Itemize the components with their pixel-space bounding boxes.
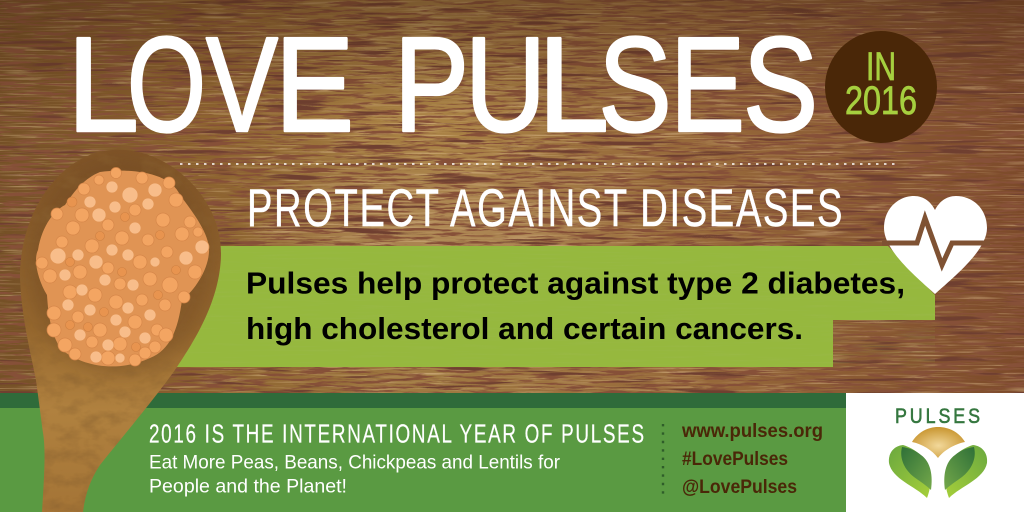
wood background <box>0 0 1024 394</box>
title: L <box>538 9 609 160</box>
logo right leaf <box>944 445 987 498</box>
logo wordmark: PULSES <box>895 405 980 428</box>
spoon <box>20 150 221 512</box>
logo sun <box>912 427 965 458</box>
title: V <box>206 9 278 160</box>
subheading: PROTECT AGAINST DISEASES <box>247 178 842 237</box>
title: S <box>598 9 672 160</box>
icon: heart with pulse <box>882 196 990 294</box>
footer links: #LovePulses <box>682 449 788 470</box>
footer tagline: People and the Planet! <box>149 476 347 498</box>
footer heading: 2016 IS THE INTERNATIONAL YEAR OF PULSES <box>149 420 644 448</box>
dotted divider <box>180 163 900 165</box>
title: E <box>275 9 354 160</box>
title: O <box>127 9 206 160</box>
callout text <box>246 266 905 346</box>
green footer band <box>0 393 846 512</box>
title <box>67 9 818 160</box>
title: E <box>670 9 745 160</box>
logo left leaf <box>889 445 932 498</box>
logo: pulses <box>889 405 987 498</box>
dotted vertical divider <box>662 424 664 498</box>
footer links: www.pulses.org <box>681 421 823 442</box>
callout text: Pulses help protect against type 2 diabetes, <box>246 266 905 300</box>
callout box <box>170 246 935 367</box>
footer tagline <box>149 452 560 498</box>
title: U <box>465 9 546 160</box>
badge: in 2016: 2016 <box>845 79 917 123</box>
callout text: high cholesterol and certain cancers. <box>246 311 803 346</box>
footer tagline: Eat More Peas, Beans, Chickpeas and Lentils for <box>149 452 560 474</box>
title: L <box>67 9 139 160</box>
badge: in 2016: IN <box>866 45 896 89</box>
footer links: @LovePulses <box>682 477 797 498</box>
badge: in 2016 <box>825 31 937 143</box>
title: S <box>743 9 818 160</box>
lentils <box>36 168 209 366</box>
title: P <box>394 9 469 160</box>
footer links <box>681 421 823 498</box>
white logo panel <box>846 393 1024 512</box>
spoon with lentils <box>20 150 221 512</box>
